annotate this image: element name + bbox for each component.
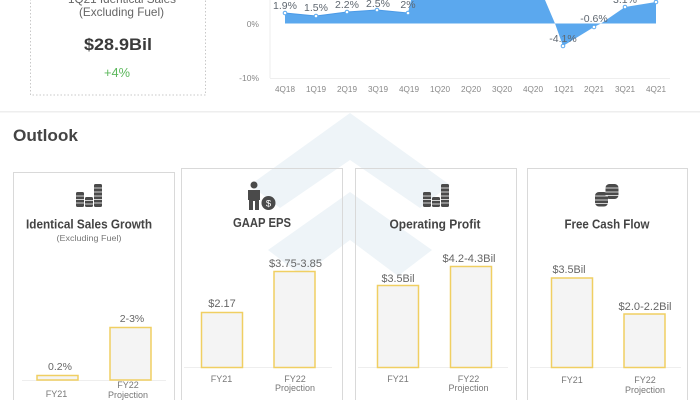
- bar: FY22 projection: 2-3%: [120, 313, 144, 325]
- icon: person with dollar coin: [248, 182, 276, 210]
- bar: FY22 projection: FY22: [117, 380, 139, 390]
- area chart: quarterly identical sales growth: 4Q20: [523, 85, 543, 94]
- bar: FY21: [552, 264, 592, 385]
- bar: FY22 projection: Projection: [275, 383, 315, 393]
- area chart: quarterly identical sales growth: 4Q18: [275, 85, 295, 94]
- area chart: quarterly identical sales growth: 1Q21: [554, 85, 574, 94]
- icon: coins: [595, 184, 618, 206]
- area chart: quarterly identical sales growth: [239, 0, 670, 94]
- bar: FY21: $3.5Bil: [552, 264, 586, 276]
- watermark logo: [250, 113, 450, 276]
- heading: Identical Sales Growth: [26, 216, 152, 232]
- heading: Free Cash Flow: [564, 216, 650, 232]
- heading: GAAP EPS: [233, 215, 291, 230]
- icon: coin stacks: [423, 184, 449, 207]
- area chart: quarterly identical sales growth: 1Q20: [430, 85, 450, 94]
- bar: FY22 projection: [442, 253, 496, 393]
- area chart: quarterly identical sales growth: 4Q19: [399, 85, 419, 94]
- area chart: quarterly identical sales growth: 1.9%: [273, 0, 297, 12]
- area chart: quarterly identical sales growth: -4.1%: [549, 33, 577, 45]
- area chart: quarterly identical sales growth: 2Q21: [584, 85, 604, 94]
- panel: free cash flow: [528, 168, 688, 400]
- panel: operating profit: [356, 168, 516, 400]
- bar: FY22 projection: [618, 301, 672, 395]
- bar: FY21: [378, 273, 418, 384]
- panel: identical sales summary: $28.9Bil: [84, 35, 152, 54]
- area chart: quarterly identical sales growth: 2Q20: [461, 85, 481, 94]
- panel: identical sales summary: [30, 0, 206, 95]
- bar: FY22 projection: FY22: [284, 374, 306, 384]
- area chart: quarterly identical sales growth: 3Q21: [615, 85, 635, 94]
- area chart: quarterly identical sales growth: 4Q21: [646, 85, 666, 94]
- panel: identical sales summary: (Excluding Fuel): [79, 5, 164, 19]
- bar: FY22 projection: FY22: [634, 375, 656, 385]
- area chart: quarterly identical sales growth: -10%: [239, 73, 259, 83]
- heading: Operating Profit: [390, 216, 481, 232]
- bar: FY22 projection: Projection: [625, 385, 665, 395]
- bar: FY22 projection: FY22: [458, 374, 479, 384]
- bar: FY21: 0.2%: [48, 361, 72, 373]
- subheading: (Excluding Fuel): [56, 233, 122, 243]
- icon: person with dollar coin: $: [266, 198, 272, 210]
- bar: FY21: $3.5Bil: [382, 273, 414, 285]
- panel: identical sales growth: [14, 172, 174, 400]
- bar: FY22 projection: Projection: [448, 383, 489, 393]
- bar: FY21: FY21: [387, 374, 409, 384]
- bar: FY22 projection: $4.2-4.3Bil: [442, 253, 496, 265]
- icon: coin stacks: [76, 184, 102, 207]
- panel: GAAP EPS: [182, 168, 342, 400]
- area chart: quarterly identical sales growth: 1.5%: [304, 2, 328, 14]
- bar: FY21: [202, 298, 242, 384]
- bar: FY21: $2.17: [208, 298, 236, 310]
- bar: FY21: [37, 361, 78, 399]
- bar: FY21: FY21: [211, 374, 232, 384]
- bar: FY22 projection: $2.0-2.2Bil: [618, 301, 672, 313]
- area chart: quarterly identical sales growth: 2Q19: [337, 85, 357, 94]
- area chart: quarterly identical sales growth: 0%: [247, 19, 259, 29]
- bar: FY22 projection: Projection: [108, 390, 148, 400]
- bar: FY21: FY21: [561, 375, 583, 385]
- area chart: quarterly identical sales growth: 1Q19: [306, 85, 326, 94]
- area chart: quarterly identical sales growth: -0.6%: [580, 13, 608, 25]
- bar: FY21: FY21: [46, 389, 67, 399]
- bar: FY22 projection: [108, 313, 151, 400]
- panel: identical sales summary: +4%: [104, 65, 130, 80]
- area chart: quarterly identical sales growth: 3Q20: [492, 85, 512, 94]
- bar: FY22 projection: $3.75-3.85: [269, 258, 322, 270]
- bar: FY22 projection: [269, 258, 322, 393]
- area chart: quarterly identical sales growth: 3Q19: [368, 85, 388, 94]
- heading: Outlook: Outlook: [13, 126, 79, 145]
